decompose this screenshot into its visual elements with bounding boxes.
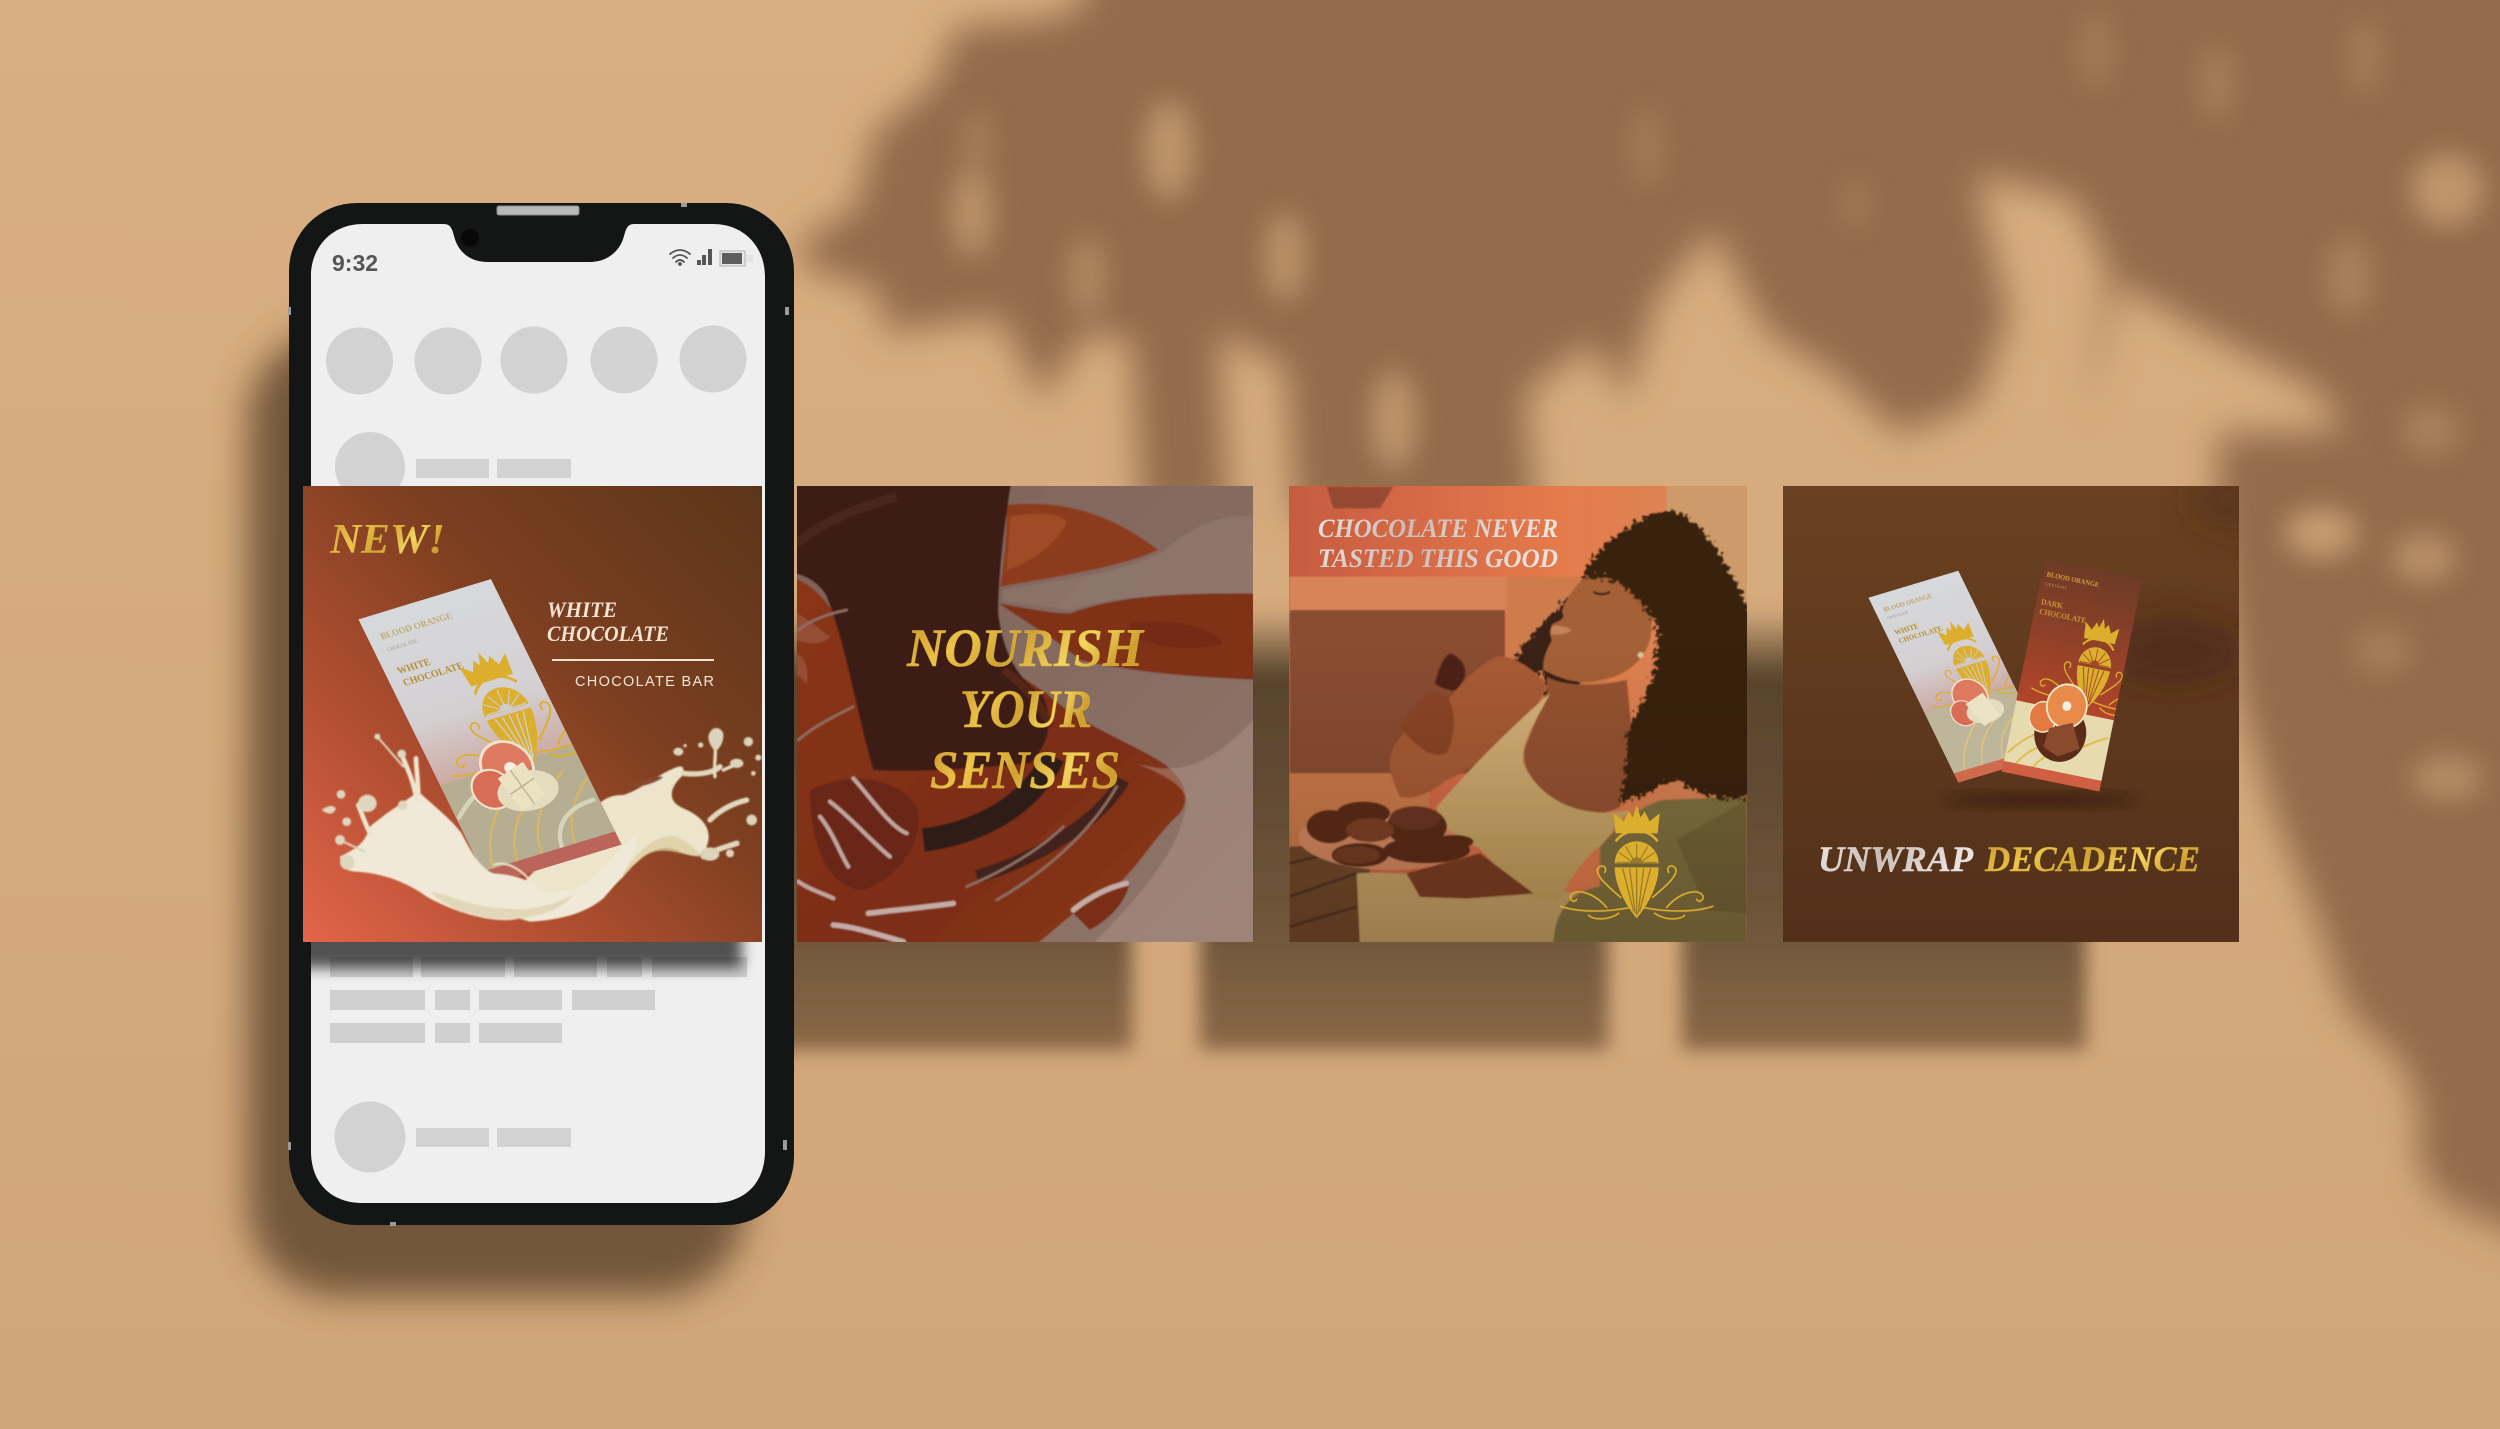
plate of cookies: [1297, 802, 1473, 874]
heading: unwrap decadence: [1818, 839, 2200, 879]
signal icon: [697, 249, 712, 265]
dark bar: BLOOD ORANGE: [2046, 571, 2100, 589]
wifi icon: [670, 250, 690, 265]
hair: [1582, 510, 1753, 803]
milk splash front: [322, 734, 637, 922]
panel: post 1 white chocolate: [303, 486, 762, 942]
two chocolate bars: [1868, 558, 2169, 797]
heading: unwrap decadence: DECADENCE: [1984, 839, 2200, 879]
milk splash back: [524, 727, 762, 894]
post cast shadows: [760, 610, 2086, 1050]
melted chocolate image: [790, 480, 1260, 950]
post header placeholder: [335, 432, 571, 502]
blood orange slice: [470, 740, 535, 810]
heading: NEW!: NEW!: [329, 517, 445, 563]
panel: post 3 woman eating chocolate: [1280, 480, 1753, 950]
cookie in hand: [1435, 653, 1465, 691]
white bar: CHOCOLATE: [1887, 610, 1910, 620]
raised arm: [1390, 656, 1547, 798]
chocolate bar: white: CHOCOLATE: [386, 639, 419, 653]
phone cast shadow: [248, 330, 746, 1296]
footer profile placeholder: [334, 1102, 571, 1172]
tagline: [1318, 514, 1558, 573]
dark bar: CHOCOLATE: [2038, 607, 2087, 625]
tree shadow: blurred foliage silhouette: [802, 0, 2500, 1245]
phone: [260, 203, 794, 1226]
status time: 9:32: [332, 250, 378, 276]
chocolate bar: white: [322, 569, 655, 922]
dark bar: DARK: [2040, 597, 2065, 611]
hand: [1400, 693, 1454, 755]
hair behind face: [1513, 595, 1582, 698]
battery icon: [720, 251, 753, 266]
leaf shade on post: [2105, 470, 2290, 686]
overall shade: [1280, 647, 1750, 950]
heading: unwrap decadence: UNWRAP: [1818, 839, 1974, 879]
chocolate bar: white: WHITE: [395, 657, 433, 677]
phone body: [289, 203, 794, 1225]
phone screen: [311, 224, 765, 1203]
face: [1543, 574, 1652, 682]
shadow of post on screen: [311, 942, 753, 979]
product name: WHITE: [547, 597, 617, 622]
tagline: CHOCOLATE NEVER: [1318, 514, 1558, 543]
dark bar: [2002, 558, 2169, 797]
white bar: CHOCOLATE: [1897, 624, 1944, 645]
tank top: [1437, 693, 1630, 903]
dark chocolate circle: [2029, 701, 2091, 767]
forearm under plate: [1407, 853, 1533, 898]
heading: nourish your senses: NOURISH: [906, 618, 1145, 678]
product name: [548, 602, 668, 641]
white bar: [1868, 564, 2071, 783]
front camera: [461, 229, 479, 247]
white bar: BLOOD ORANGE: [1882, 593, 1934, 614]
dark bar: CHOCOLATE: [2044, 581, 2068, 591]
caption placeholder bars: [330, 957, 747, 1043]
chest: [1524, 677, 1633, 814]
bar floor shadow: [1945, 793, 2135, 807]
panel: post 2 nourish your senses: [790, 480, 1260, 950]
chocolate bar: white: BLOOD ORANGE: [379, 612, 454, 642]
product name: CHOCOLATE: [547, 621, 669, 646]
logo gold crest: [1561, 805, 1713, 919]
green shirt: [1553, 797, 1747, 947]
product type: CHOCOLATE BAR: [575, 674, 714, 690]
white chocolate pieces: [497, 762, 558, 812]
chocolate bar: white: CHOCOLATE: [401, 661, 466, 689]
divider line: [552, 659, 714, 661]
heading: nourish your senses: [906, 630, 1145, 789]
white bar: WHITE: [1893, 621, 1920, 637]
photo: woman with plate of cookies: [1280, 480, 1753, 950]
tagline: TASTED THIS GOOD: [1318, 544, 1558, 573]
phone edge highlights: [288, 203, 789, 1226]
speaker: [497, 206, 579, 215]
panel: post 4 unwrap decadence: [1783, 470, 2290, 942]
heading: nourish your senses: YOUR: [960, 679, 1092, 739]
story circles: [326, 326, 746, 394]
heading: nourish your senses: SENSES: [930, 740, 1120, 800]
